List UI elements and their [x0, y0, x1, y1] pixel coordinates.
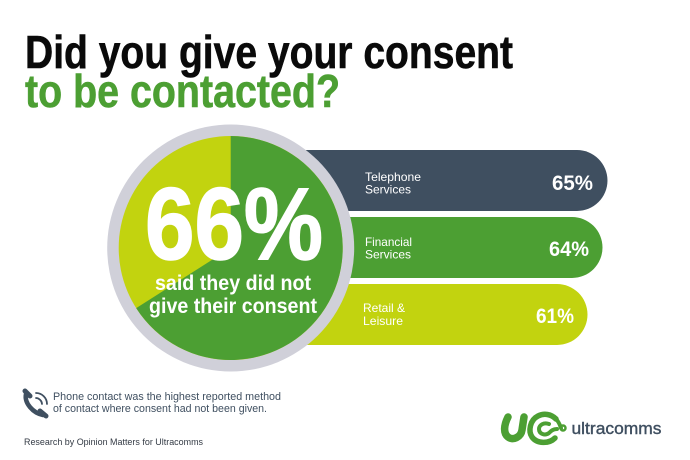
bar: telephone services: Telephone	[365, 170, 421, 184]
pie chart: 66 percent	[107, 124, 354, 372]
bar: retail and leisure: 61%	[536, 305, 574, 328]
bar: telephone services	[290, 150, 607, 211]
phone note	[53, 391, 281, 415]
phone note: of contact where consent had not been given.	[53, 403, 267, 415]
bar: telephone services: 65%	[552, 172, 593, 195]
logo mark	[505, 414, 566, 442]
bar: retail and leisure: Leisure	[363, 314, 403, 328]
title: Did you give your consent	[25, 26, 513, 78]
bar: financial services: 64%	[549, 238, 589, 261]
pie caption: give their consent	[149, 295, 317, 318]
title	[25, 26, 513, 117]
logo: ultracomms	[505, 414, 662, 442]
source note: Research by Opinion Matters for Ultracomms	[24, 437, 203, 448]
bar: retail and leisure	[290, 284, 588, 345]
phone note: Phone contact was the highest reported method	[53, 391, 281, 403]
bar: financial services	[290, 217, 602, 278]
bar: financial services: Services	[365, 248, 411, 262]
icon: phone	[25, 391, 47, 416]
title: to be contacted?	[25, 65, 340, 117]
pie caption: said they did not	[155, 272, 311, 295]
bar: retail and leisure: Retail &	[363, 301, 405, 315]
bar: financial services: Financial	[365, 235, 412, 249]
bar: telephone services: Services	[365, 182, 411, 196]
pie caption	[149, 272, 317, 318]
logo wordmark: ultracomms	[572, 419, 662, 438]
big figure: 66%	[145, 167, 323, 281]
